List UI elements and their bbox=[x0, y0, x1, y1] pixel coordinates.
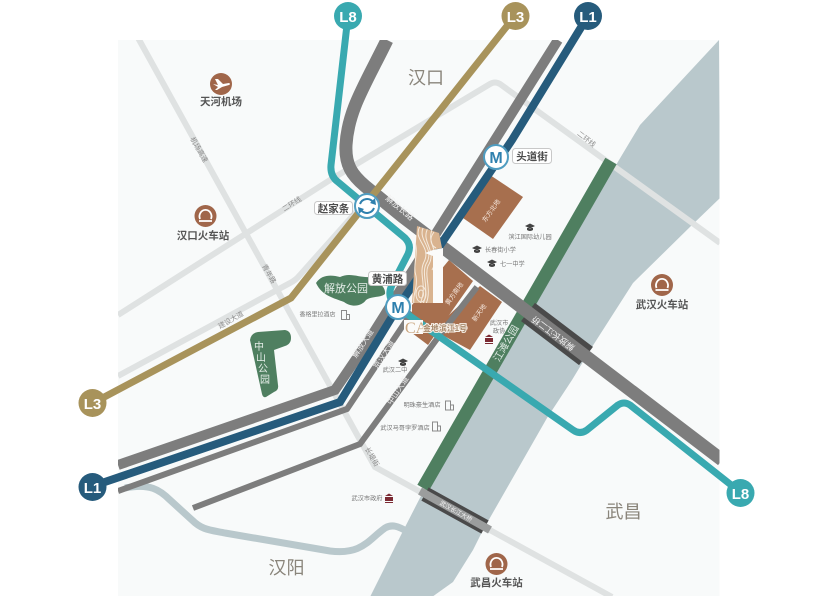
line badge: L8 top bbox=[334, 2, 362, 30]
landmark: Wuchang railway station: 武昌火车站 bbox=[470, 576, 523, 589]
park: Zhongshan: 公 bbox=[258, 364, 268, 375]
station label: Toudaojie bbox=[512, 148, 552, 164]
landmark: Wuhan railway station: 武汉火车站 bbox=[636, 298, 689, 311]
Yangtze river bbox=[370, 40, 720, 597]
hotel: Pearl Howard Johnson bbox=[403, 401, 454, 410]
line badge: L8 right: L8 bbox=[732, 486, 749, 503]
school: Binjiang kindergarten bbox=[508, 224, 552, 241]
project building: timber tower bbox=[412, 226, 443, 304]
district labels: 武昌 bbox=[606, 502, 642, 522]
landmark: Hankou railway station: 汉口火车站 bbox=[177, 229, 230, 242]
road labels: 二环线 bbox=[280, 194, 303, 213]
park: Zhongshan bbox=[250, 330, 291, 397]
school: Changchun street primary: 长春街小学 bbox=[485, 246, 516, 254]
hotel: Shangri-La bbox=[299, 310, 350, 320]
metro line L3 bbox=[93, 16, 515, 403]
project logo: 金地滨江1号 bbox=[423, 323, 467, 333]
landmark: Tianhe airport: 天河机场 bbox=[200, 95, 242, 108]
project logo bbox=[404, 320, 467, 337]
metro icon: Huangpu Road: M bbox=[391, 300, 405, 317]
park label: riverside park: 江滩公园 bbox=[490, 323, 522, 364]
lower trunk road bbox=[118, 312, 412, 491]
park: Zhongshan: 中 bbox=[254, 340, 264, 353]
school: Qiyi middle: 七一中学 bbox=[500, 260, 525, 268]
line badge: L8 right bbox=[726, 479, 754, 507]
lower bridge bbox=[420, 491, 490, 530]
metro icon: Toudaojie: M bbox=[489, 150, 503, 167]
hotel: Shangri-La: 香格里拉酒店 bbox=[299, 310, 336, 318]
road labels: 长堤街 bbox=[363, 445, 381, 468]
parcel: south block bbox=[412, 260, 473, 345]
labels on dark roads: 中山大道 bbox=[385, 374, 410, 407]
labels on dark roads: 京汉大道 bbox=[371, 338, 396, 371]
line badge: L1 top bbox=[574, 2, 602, 30]
hotel: Marco Polo bbox=[380, 422, 440, 432]
labels on dark roads: 解放大道 bbox=[350, 327, 375, 360]
road labels: 建设大道 bbox=[216, 309, 245, 331]
landmark: Wuhan railway station bbox=[636, 274, 689, 311]
government: Wuhan CPPCC: 政协 bbox=[493, 327, 506, 335]
labels on dark roads bbox=[350, 193, 577, 523]
school: Wuhan No.2 middle bbox=[383, 358, 408, 374]
interchange icon: Zhaojiatiao bbox=[355, 194, 379, 218]
upper bridge dark edges bbox=[528, 312, 586, 356]
park: Zhongshan: 园 bbox=[260, 374, 270, 386]
station label: Toudaojie: 头道街 bbox=[516, 150, 548, 163]
line badge: L8 top: L8 bbox=[339, 9, 357, 26]
government: Wuhan CPPCC: 武汉市 bbox=[490, 319, 508, 327]
landmark: Wuchang railway station bbox=[470, 553, 523, 589]
hotels bbox=[299, 310, 454, 432]
station label: Huangpu Road: 黄浦路 bbox=[372, 272, 404, 286]
metro icon: Huangpu Road bbox=[386, 295, 410, 319]
parcel: new heaven block: 新天地 bbox=[470, 302, 489, 323]
government: Wuhan municipal government: 武汉市政府 bbox=[352, 494, 382, 502]
line badge: L3 top: L3 bbox=[507, 9, 524, 26]
park: Zhongshan: 山 bbox=[256, 352, 266, 364]
station label: Zhaojiatiao: 赵家条 bbox=[318, 202, 350, 215]
metro line L1 bbox=[93, 16, 588, 486]
metro line L8 bbox=[331, 16, 740, 492]
line badge: L3 left bbox=[78, 389, 106, 417]
landmark: Hankou railway station bbox=[177, 205, 230, 242]
district labels: 汉阳 bbox=[268, 558, 304, 578]
elevated ring road bbox=[346, 40, 722, 460]
line badge: L1 top: L1 bbox=[579, 9, 597, 26]
district labels bbox=[268, 68, 642, 578]
school: Wuhan No.2 middle: 武汉二中 bbox=[383, 366, 407, 374]
river park strip bbox=[423, 161, 611, 488]
project logo: CA bbox=[405, 320, 428, 337]
minor roads bbox=[118, 36, 720, 597]
labels on dark roads: 武汉长江大桥 bbox=[438, 499, 474, 523]
parcel: south block: 黄方南地 bbox=[443, 280, 465, 307]
parcel: north block bbox=[463, 175, 523, 239]
Zhongshan avenue road bbox=[193, 287, 477, 508]
labels on dark roads: 解放长江二桥 bbox=[529, 314, 577, 353]
line badge: L3 top bbox=[502, 2, 530, 30]
parcel: north block: 东方北地 bbox=[480, 197, 502, 224]
road labels: 青年路 bbox=[260, 262, 278, 285]
hotel: Pearl Howard Johnson: 明珠豪生酒店 bbox=[403, 401, 441, 409]
upper trunk road bbox=[118, 40, 558, 465]
hotel: Marco Polo: 武汉马哥孛罗酒店 bbox=[380, 424, 430, 432]
school: Qiyi middle bbox=[487, 260, 525, 268]
road labels: 机场高速 bbox=[188, 135, 210, 164]
parcel: new heaven block bbox=[443, 286, 502, 350]
government: Wuhan municipal government bbox=[352, 494, 393, 503]
school: Changchun street primary bbox=[472, 246, 516, 254]
line badge: L1 left bbox=[78, 473, 106, 501]
schools bbox=[383, 224, 552, 374]
district labels: 汉口 bbox=[408, 68, 444, 88]
line badge: L1 left: L1 bbox=[84, 480, 101, 497]
map background panel bbox=[118, 40, 720, 596]
labels on dark roads: 解放长路 bbox=[384, 193, 417, 223]
school: Binjiang kindergarten: 滨江国际幼儿园 bbox=[508, 233, 552, 241]
landmark: Tianhe airport bbox=[200, 73, 242, 108]
metro icon: Toudaojie bbox=[484, 145, 508, 169]
road labels: 二环线 bbox=[575, 129, 598, 149]
line badge: L3 left: L3 bbox=[84, 396, 101, 413]
road labels bbox=[188, 129, 598, 468]
park: Jiefang: 解放公园 bbox=[324, 281, 368, 295]
park: Jiefang bbox=[316, 275, 385, 306]
Han river bbox=[125, 486, 408, 552]
government: Wuhan CPPCC bbox=[485, 319, 508, 344]
base map layers bbox=[118, 36, 722, 597]
